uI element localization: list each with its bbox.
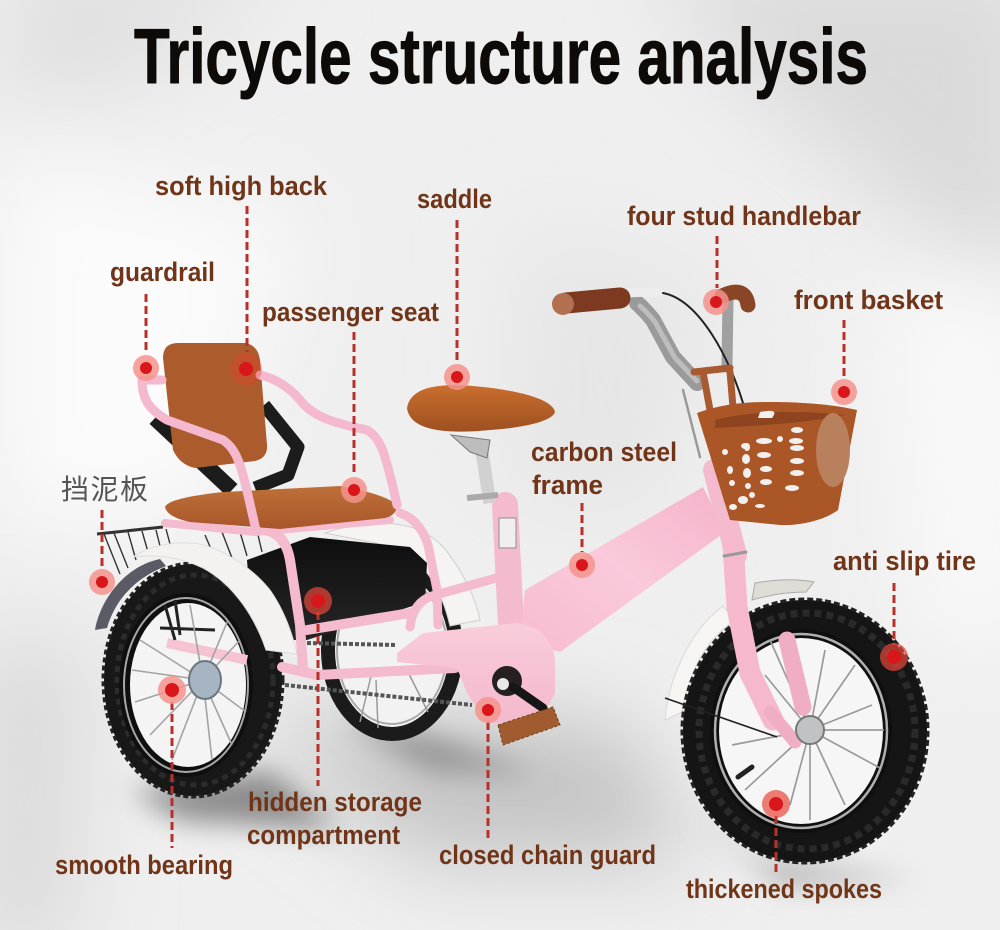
front basket <box>697 402 857 525</box>
grip end cap <box>552 293 574 315</box>
label: anti slip tire <box>833 546 976 671</box>
handlebar <box>566 292 748 457</box>
storage compartment <box>247 537 427 640</box>
seat belts <box>155 405 298 490</box>
chain <box>285 643 472 705</box>
label: front basket: front basket <box>794 285 943 315</box>
head tube and fork <box>714 470 795 742</box>
label: carbon steel frame: carbon steel <box>531 437 677 467</box>
guardrails <box>142 375 397 530</box>
pink frame <box>165 505 803 707</box>
label: thickened spokes: thickened spokes <box>686 874 882 904</box>
label: saddle: saddle <box>417 184 492 214</box>
label: four stud handlebar: four stud handlebar <box>627 201 861 231</box>
label: mudguard (Chinese): 挡泥板 <box>61 474 148 505</box>
label: carbon steel frame: frame <box>532 470 603 500</box>
far rear wheel <box>328 566 456 734</box>
label: smooth bearing <box>55 676 233 880</box>
label: passenger seat: passenger seat <box>262 297 439 327</box>
label: closed chain guard <box>439 697 656 870</box>
front wheel <box>665 599 928 863</box>
label: soft high back: soft high back <box>155 171 328 201</box>
front fender <box>665 606 735 720</box>
crank and pedal <box>492 666 560 745</box>
brake arch <box>752 580 814 600</box>
soft high back <box>163 343 267 468</box>
label: smooth bearing: smooth bearing <box>55 850 233 880</box>
label: closed chain guard: closed chain guard <box>439 840 656 870</box>
label: passenger seat <box>262 297 439 503</box>
label: front basket <box>794 285 943 405</box>
chain guard <box>397 623 555 723</box>
label: soft high back <box>155 171 328 385</box>
label: four stud handlebar <box>627 201 861 315</box>
label: mudguard (Chinese) <box>61 474 148 595</box>
tricycle illustration <box>95 292 928 863</box>
basket holes <box>722 427 804 510</box>
down tube <box>520 487 725 652</box>
label: hidden storage compartment: hidden storage <box>248 787 422 817</box>
rear left wheel <box>103 563 283 797</box>
rear basket <box>97 527 262 574</box>
fork hub <box>796 716 824 744</box>
passenger seat <box>165 486 397 529</box>
rear fender <box>95 543 297 654</box>
label: thickened spokes <box>686 790 882 904</box>
label: saddle <box>417 184 492 390</box>
far rear fender <box>325 523 480 626</box>
label: hidden storage compartment <box>247 587 422 850</box>
label: hidden storage compartment: compartment <box>247 820 400 850</box>
label: anti slip tire: anti slip tire <box>833 546 976 576</box>
seat tube sticker <box>499 518 516 548</box>
seat post <box>451 435 498 503</box>
label: guardrail <box>110 257 215 381</box>
label: carbon steel frame <box>531 437 677 578</box>
label: guardrail: guardrail <box>110 257 215 287</box>
saddle <box>407 385 555 432</box>
